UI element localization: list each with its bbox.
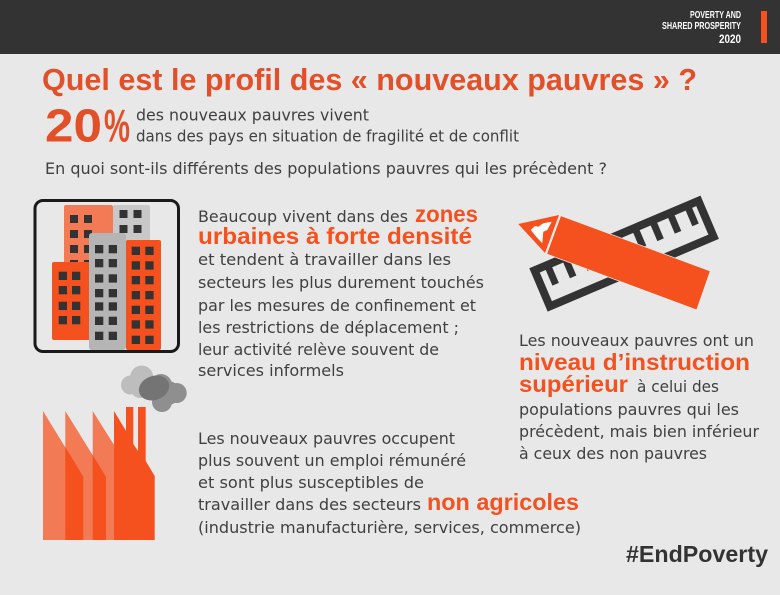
text block: urban areas: les restrictions de déplacement ;	[198, 318, 459, 337]
text block: paid non-agricultural jobs: non agricoles	[427, 489, 579, 515]
text block: urban areas: par les mesures de confinement et	[198, 296, 476, 315]
smoke cloud	[121, 366, 187, 412]
header label: SHARED PROSPERITY	[662, 21, 741, 32]
pencil tip	[518, 215, 559, 253]
icon: city buildings	[35, 200, 178, 352]
text block: paid non-agricultural jobs: plus souvent un emploi rémunéré	[198, 451, 466, 470]
text block: urban areas	[198, 201, 484, 380]
header label: POVERTY AND	[690, 10, 741, 21]
text block: urban areas: zones	[415, 201, 478, 227]
pencil body	[547, 216, 710, 310]
statistic caption: des nouveaux pauvres vivent	[136, 106, 369, 124]
statistic: 20%: 20	[45, 100, 102, 152]
text block: education level: Les nouveaux pauvres ont un	[519, 331, 754, 350]
text block: urban areas: et tendent à travailler dans les	[198, 250, 451, 269]
text block: education level	[519, 331, 759, 463]
statistic caption	[136, 106, 519, 146]
header label: 2020	[719, 34, 741, 46]
hashtag: #EndPoverty	[626, 541, 768, 567]
text block: urban areas: leur activité relève souvent de	[198, 340, 439, 359]
text block: paid non-agricultural jobs: et sont plus susceptibles de	[198, 473, 424, 492]
subtitle question: En quoi sont-ils différents des populations pauvres qui les précèdent ?	[45, 159, 607, 178]
text block: education level: supérieur	[519, 371, 628, 397]
statistic: 20%	[45, 100, 519, 152]
text block: urban areas: urbaines à forte densité	[198, 223, 472, 249]
text block: education level: à ceux des non pauvres	[519, 444, 707, 463]
text block: education level: populations pauvres qui les	[519, 400, 739, 419]
text block: education level: précèdent, mais bien inférieur	[519, 422, 759, 441]
text block: paid non-agricultural jobs: Les nouveaux pauvres occupent	[198, 429, 455, 448]
statistic caption: dans des pays en situation de fragilité et de conflit	[136, 126, 519, 146]
text block: paid non-agricultural jobs: travailler dans des secteurs	[198, 495, 421, 514]
text block: education level: niveau d’instruction	[519, 349, 750, 375]
text block: urban areas: services informels	[198, 361, 344, 380]
text block: education level: à celui des	[637, 377, 719, 396]
title: Quel est le profil des « nouveaux pauvres » ?	[42, 63, 697, 97]
ruler	[535, 201, 714, 306]
text block: urban areas: secteurs les plus durement touchés	[198, 273, 484, 292]
statistic: 20%: %	[104, 100, 130, 152]
header band	[0, 0, 780, 54]
header accent bar	[761, 11, 767, 43]
text block: urban areas: Beaucoup vivent dans des	[198, 207, 408, 226]
icon: factory with smoke	[43, 366, 187, 540]
header label	[662, 10, 741, 46]
text block: paid non-agricultural jobs: (industrie manufacturière, services, commerce)	[198, 518, 581, 537]
text block: paid non-agricultural jobs	[198, 429, 581, 537]
icon: ruler and pencil	[518, 201, 714, 310]
